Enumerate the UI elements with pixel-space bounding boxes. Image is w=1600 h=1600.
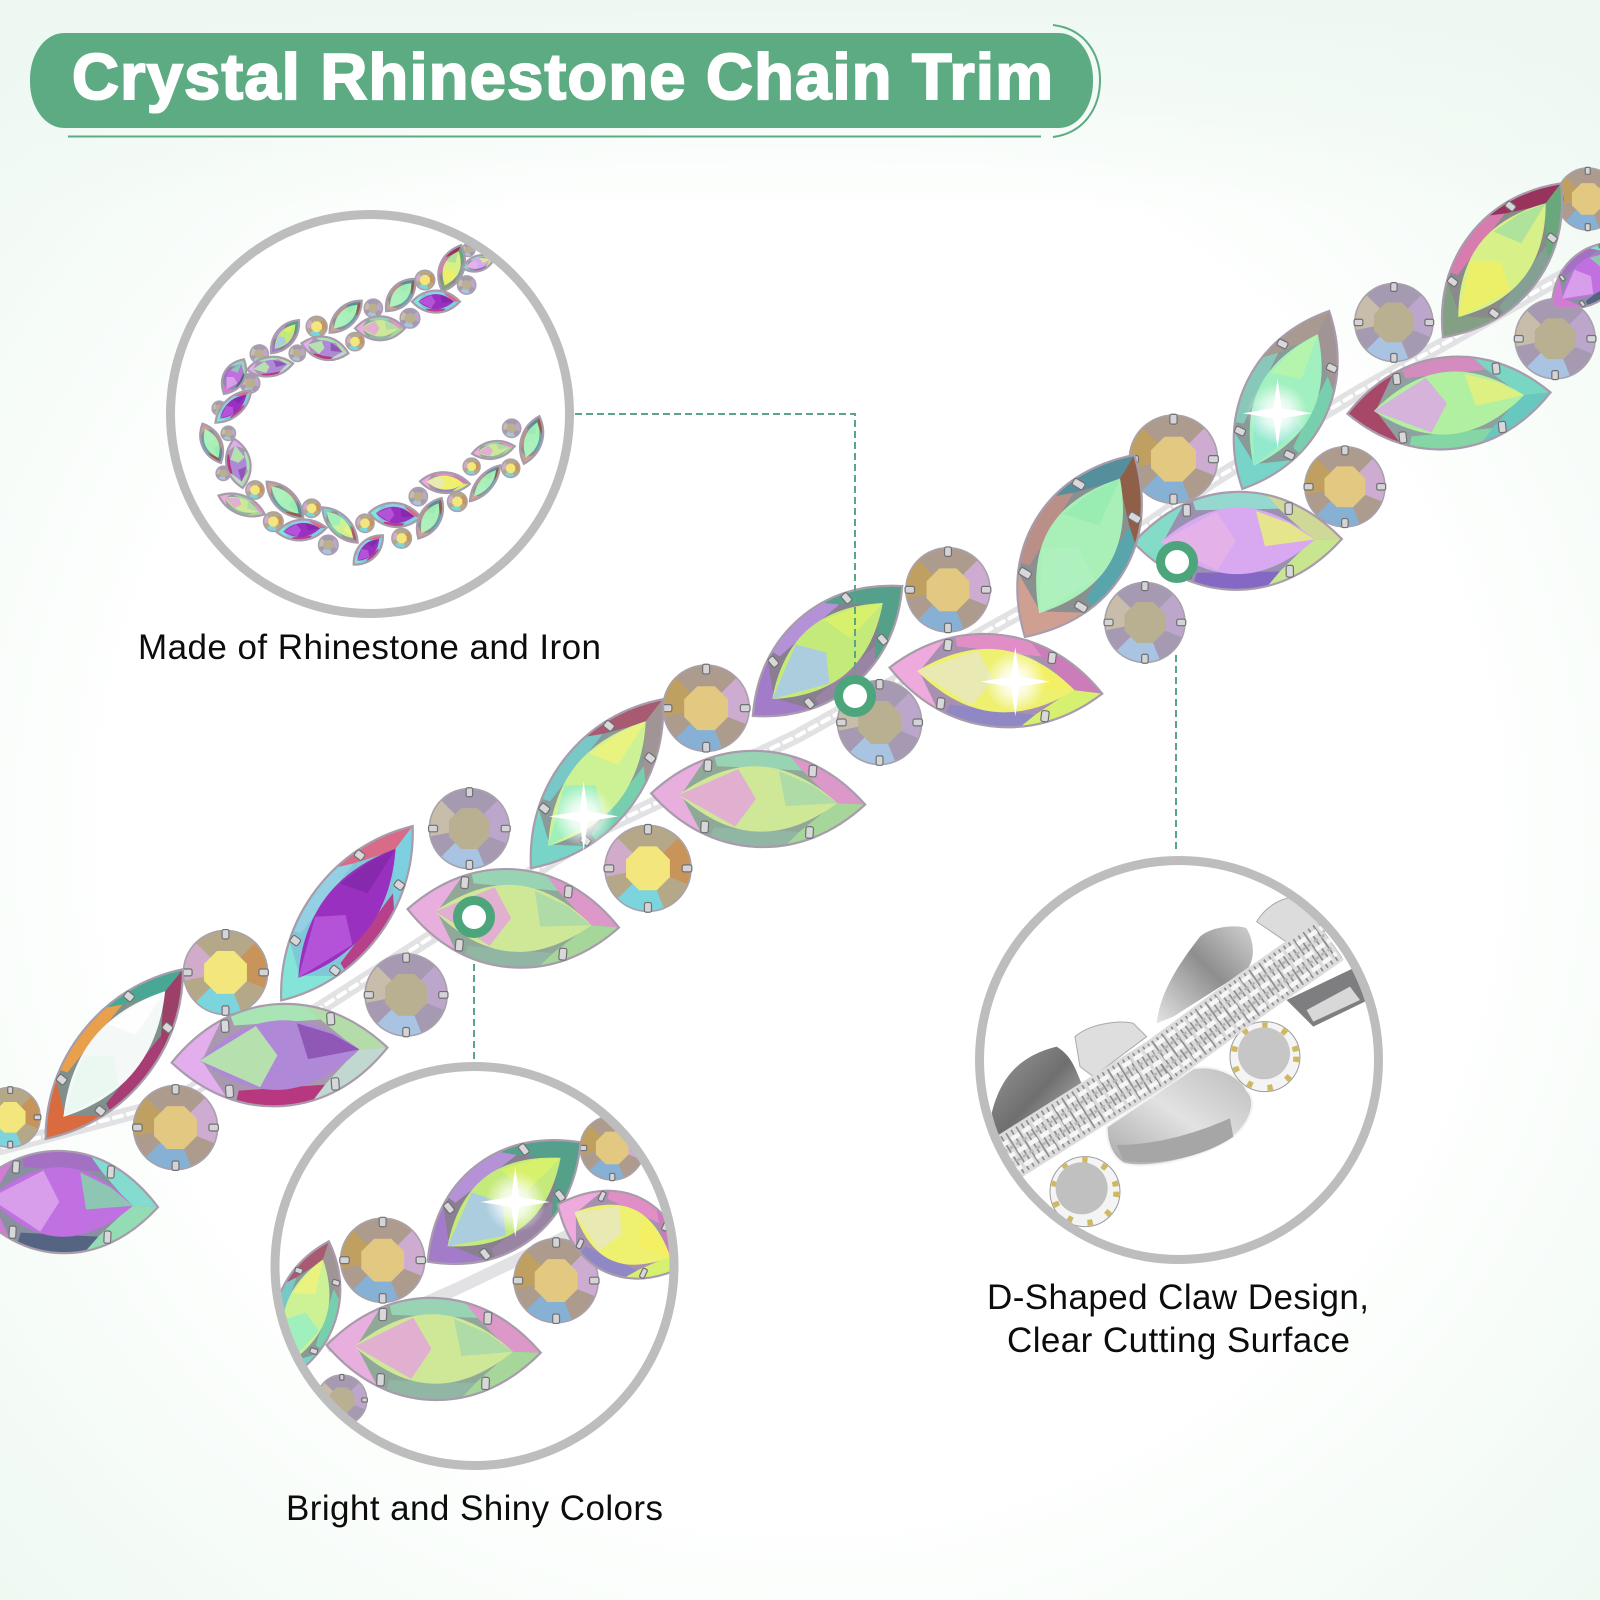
main rhinestone chain — [0, 158, 1600, 1258]
panel ring — [275, 1066, 674, 1466]
panel: made of rhinestone and iron — [138, 214, 601, 667]
label: D-Shaped Claw Design, — [987, 1278, 1369, 1317]
round stones — [0, 167, 1600, 1170]
marquise stones — [0, 158, 1600, 1258]
mini chain overview — [194, 241, 549, 571]
label: Made of Rhinestone and Iron — [138, 628, 601, 667]
panel: bright and shiny colors — [254, 1066, 704, 1528]
title banner — [30, 25, 1100, 137]
panel ring — [980, 860, 1378, 1260]
banner outline arc — [68, 25, 1100, 137]
label: Clear Cutting Surface — [1007, 1321, 1350, 1360]
dashed connector: material — [575, 414, 855, 680]
label: Bright and Shiny Colors — [286, 1489, 663, 1528]
banner pill — [30, 33, 1093, 128]
marker dot: claw — [1160, 546, 1194, 578]
magnified stones — [281, 1117, 670, 1422]
dashed connector: colors — [473, 964, 475, 1062]
panel ring — [170, 214, 570, 614]
label — [987, 1278, 1369, 1360]
panel: d-shaped claw design — [979, 860, 1379, 1360]
dashed connector: claw — [1175, 655, 1177, 853]
back view of metal settings — [992, 897, 1368, 1227]
marker dot: colors — [458, 900, 490, 934]
silver chain base — [0, 255, 1600, 1148]
sparkles — [549, 379, 1312, 851]
title: Crystal Rhinestone Chain Trim — [72, 40, 1053, 113]
marker dot: material — [838, 680, 872, 712]
